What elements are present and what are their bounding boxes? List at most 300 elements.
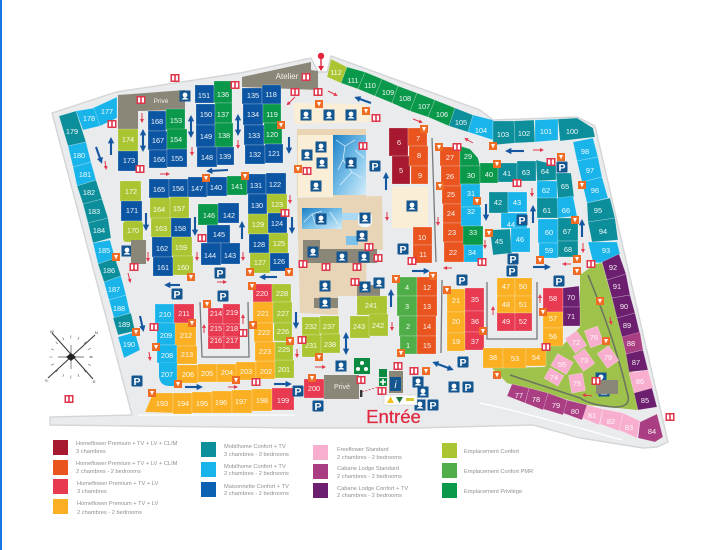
lots: pink lodges on lawn: 75 bbox=[573, 379, 581, 388]
lots: pink lodges on lawn bbox=[544, 326, 619, 393]
legend column 3: Cabane Lodge Confort + TV bbox=[337, 486, 408, 492]
lots: central-west block: 142 bbox=[223, 211, 235, 220]
lots: central block 231-243: 242 bbox=[372, 321, 384, 330]
lots: block 22-46: 46 bbox=[516, 235, 524, 244]
legend column 1: Homeflower Premium + TV + LV bbox=[77, 481, 159, 487]
lots: central block 231-243: 237 bbox=[323, 322, 335, 331]
lots: central-west block: 159 bbox=[175, 243, 187, 252]
lots: south-east perimeter: 90 bbox=[620, 302, 628, 311]
lots: block 47-58: 70 bbox=[567, 293, 575, 302]
lots: south-west block: 203 bbox=[240, 367, 252, 376]
lots: block 47-58: 47 bbox=[502, 282, 510, 291]
lots: block 22-46: 27 bbox=[446, 153, 454, 162]
lots: north-west perimeter: 179 bbox=[66, 127, 78, 136]
lots: north-east strip 112-100: 109 bbox=[382, 88, 394, 97]
lots: north-west perimeter: 186 bbox=[103, 266, 115, 275]
lots: south row 193-200 bbox=[145, 379, 324, 414]
lots: block 135-118: 118 bbox=[265, 90, 277, 99]
lots: south-west block: 220 bbox=[256, 289, 268, 298]
lots: east strip 98-93: 98 bbox=[581, 147, 589, 156]
lots: south-west block: 222 bbox=[258, 328, 270, 337]
lots: block 1-4 and 12-15: 1 bbox=[406, 341, 410, 350]
icons: parking signs: P bbox=[508, 266, 516, 278]
lawn: south-east field bbox=[492, 263, 638, 410]
lots: central-west block: 170 bbox=[127, 226, 139, 235]
lots: south row 193-200: 199 bbox=[277, 396, 289, 405]
lots: block 59-68: 67 bbox=[563, 227, 571, 236]
lots: block 5-9: 5 bbox=[399, 166, 403, 175]
lots: block 168-136: 174 bbox=[122, 135, 134, 144]
lots: block 22-46: 63 bbox=[522, 168, 530, 177]
icons: parking signs: P bbox=[555, 276, 563, 288]
lots: central-west block bbox=[120, 173, 289, 276]
icons: parking signs: P bbox=[518, 215, 526, 227]
lots: block 19-21 and 35-37: 37 bbox=[471, 337, 479, 346]
legend column 4: Emplacement Confort PMR bbox=[464, 469, 533, 475]
lots: pink lodges on lawn: 55 bbox=[558, 360, 566, 369]
lots: north-east strip 112-100: 111 bbox=[347, 76, 359, 85]
legend column 3: Freeflower Standard bbox=[337, 447, 389, 453]
lots: block 22-46 bbox=[440, 146, 556, 262]
icons: parking signs bbox=[132, 160, 568, 413]
legend column 1: 2 chambres - 2 bedrooms bbox=[76, 469, 141, 475]
lots: block 168-136: 149 bbox=[200, 132, 212, 141]
lots: block 59-68: 59 bbox=[545, 246, 553, 255]
lots: pink lodges on lawn: 79 bbox=[604, 353, 612, 362]
lots: block 47-58: 50 bbox=[519, 282, 527, 291]
first aid icons bbox=[379, 369, 387, 386]
lots: north-east strip 112-100: 102 bbox=[518, 129, 530, 138]
legend column 1: Homeflower Premium + TV + LV + CLIM bbox=[76, 441, 178, 447]
central tan terrace with pool bbox=[297, 196, 383, 315]
lots: south-east perimeter: 78 bbox=[532, 395, 540, 404]
lots: block 135-118: 119 bbox=[266, 110, 278, 119]
lots: south-west block: 218 bbox=[226, 324, 238, 333]
lots: north-east strip 112-100: 108 bbox=[399, 94, 411, 103]
lots: block 22-46: 42 bbox=[494, 198, 502, 207]
lots: block 1-4 and 12-15: 14 bbox=[423, 322, 431, 331]
lots: block 22-46: 64 bbox=[541, 167, 549, 176]
lots: pink lodges on lawn: 73 bbox=[580, 356, 588, 365]
legend column 4 bbox=[442, 443, 533, 498]
lots: north-west perimeter: 187 bbox=[108, 285, 120, 294]
page edge stripe bbox=[0, 0, 2, 550]
lots: block 168-136: 166 bbox=[153, 155, 165, 164]
lots: block 47-58: 56 bbox=[549, 332, 557, 341]
blue traffic arrows bbox=[96, 98, 582, 387]
lots: block 1-4 and 12-15: 3 bbox=[405, 302, 409, 311]
toilets block west bbox=[131, 240, 146, 264]
lots: block 1-4 and 12-15: 13 bbox=[423, 302, 431, 311]
icons: parking signs: P bbox=[133, 376, 141, 388]
lots: south-west block: 215 bbox=[210, 324, 222, 333]
lots: central-west block: 160 bbox=[177, 263, 189, 272]
lots: central-west block: 143 bbox=[224, 251, 236, 260]
lots: central-west block: 147 bbox=[191, 184, 203, 193]
beige zone: upper services bbox=[293, 103, 372, 124]
compass rose: S bbox=[45, 378, 48, 383]
lots: south row 193-200: 198 bbox=[256, 396, 268, 405]
lots: north-east strip 112-100: 104 bbox=[475, 126, 487, 135]
entrance label: Entrée bbox=[366, 406, 421, 427]
legend column 2: 2 chambres - 2 bedrooms bbox=[224, 491, 289, 497]
lots: south-west block: 223 bbox=[259, 347, 271, 356]
lots: central-west block: 144 bbox=[204, 251, 216, 260]
lots: block 168-136: 138 bbox=[218, 131, 230, 140]
icons: parking signs: P bbox=[464, 382, 472, 394]
lots: block 22-46: 24 bbox=[447, 209, 455, 218]
lots: south-east perimeter: 83 bbox=[625, 423, 633, 432]
lots: south-east perimeter: 84 bbox=[648, 427, 656, 436]
building: Privé south: Privé bbox=[334, 384, 350, 391]
lots: pink lodges on lawn: 76 bbox=[590, 333, 598, 342]
lots: block 135-118: 121 bbox=[268, 149, 280, 158]
lots: central block 231-243: 231 bbox=[305, 341, 317, 350]
lots: block 1-4 and 12-15: 4 bbox=[405, 283, 409, 292]
lots: block 1-4 and 12-15: 2 bbox=[406, 322, 410, 331]
lots: east strip 98-93: 94 bbox=[599, 227, 607, 236]
lots: north-east strip 112-100: 106 bbox=[436, 110, 448, 119]
lots: block 168-136 bbox=[118, 81, 234, 171]
legend column 1 bbox=[53, 440, 178, 516]
lots: south-west block: 205 bbox=[201, 369, 213, 378]
lots: central-west block: 172 bbox=[125, 187, 137, 196]
lots: south-west block bbox=[155, 284, 294, 386]
lots: block 19-21 and 35-37: 35 bbox=[471, 295, 479, 304]
lots: central-west block: 131 bbox=[250, 181, 262, 190]
lots: central block 231-243: 241 bbox=[365, 301, 377, 310]
lots: block 22-46: 23 bbox=[448, 228, 456, 237]
lots: south-west block: 214 bbox=[210, 309, 222, 318]
lots: south-west block: 221 bbox=[257, 309, 269, 318]
lots: south-east perimeter: 77 bbox=[515, 391, 523, 400]
service band grey bbox=[303, 240, 380, 308]
lots: block 22-46: 40 bbox=[485, 170, 493, 179]
lots: south-west block: 228 bbox=[276, 289, 288, 298]
lots: block 22-46: 33 bbox=[469, 228, 477, 237]
lots: block 59-68: 66 bbox=[562, 206, 570, 215]
lots: block 135-118: 134 bbox=[247, 110, 259, 119]
icons: parking signs: P bbox=[216, 268, 224, 280]
lots: north-east strip 112-100: 110 bbox=[364, 81, 376, 90]
legend column 1: 2 chambres - 2 bedrooms bbox=[77, 510, 142, 516]
lots: south-west block: 216 bbox=[210, 336, 222, 345]
lots: block 168-136: 167 bbox=[152, 136, 164, 145]
lots: central-west block: 158 bbox=[174, 224, 186, 233]
lots: central-west block: 128 bbox=[253, 240, 265, 249]
lots: block 59-68: 65 bbox=[561, 182, 569, 191]
building: Privé north-west bbox=[118, 90, 185, 129]
red one-way arrows bbox=[105, 91, 611, 396]
lots: south-west block: 211 bbox=[178, 309, 190, 318]
legend column 2: 2 chambres - 2 bedrooms bbox=[224, 471, 289, 477]
lots: central-west block: 122 bbox=[269, 180, 281, 189]
lots: block 47-58: 52 bbox=[519, 317, 527, 326]
icons: parking signs: P bbox=[399, 244, 407, 256]
lots: block 22-46: 30 bbox=[467, 171, 475, 180]
lots: south-east perimeter: 88 bbox=[627, 339, 635, 348]
legend column 2: 3 chambres - 3 bedrooms bbox=[224, 452, 289, 458]
icons: parking signs: P bbox=[458, 275, 466, 287]
lots: block 168-136: 148 bbox=[201, 153, 213, 162]
lots: block 19-21 and 35-37: 20 bbox=[452, 317, 460, 326]
lots: north-east strip 112-100: 100 bbox=[566, 127, 578, 136]
lots: block 168-136: 151 bbox=[198, 91, 210, 100]
lots: south row 193-200: 193 bbox=[156, 399, 168, 408]
lots: north-west perimeter: 181 bbox=[79, 170, 91, 179]
lots: block 5-9: 10 bbox=[418, 233, 426, 242]
lots: block 135-118: 132 bbox=[249, 150, 261, 159]
icons: parking signs: P bbox=[429, 400, 437, 412]
lots: south-east perimeter: 82 bbox=[607, 417, 615, 426]
legend column 1: 3 chambres bbox=[76, 449, 106, 455]
warning signs bbox=[384, 395, 417, 405]
lots: central block 231-243: 243 bbox=[353, 322, 365, 331]
lots: block 1-4 and 12-15 bbox=[397, 277, 437, 354]
legend column 3: 2 chambres - 2 bedrooms bbox=[337, 455, 402, 461]
lots: block 22-46: 31 bbox=[467, 189, 475, 198]
lots: pink lodges on lawn: 74 bbox=[550, 373, 558, 382]
lots: central-west block: 164 bbox=[153, 205, 165, 214]
lots: north-west perimeter: 188 bbox=[113, 304, 125, 313]
building: Atelier: Atelier bbox=[276, 72, 299, 81]
lots: south-west block: 204 bbox=[221, 368, 233, 377]
lots: block 168-136: 168 bbox=[151, 117, 163, 126]
lots: central-west block: 123 bbox=[271, 200, 283, 209]
lots: block 5-9: 6 bbox=[397, 138, 401, 147]
lots: central-west block: 126 bbox=[273, 257, 285, 266]
lots: south-west block: 206 bbox=[182, 370, 194, 379]
lots: block 22-46: 25 bbox=[447, 190, 455, 199]
legend column 1: Homeflower Premium + TV + LV + CLIM bbox=[76, 461, 178, 467]
lots: north-west perimeter: 184 bbox=[93, 226, 105, 235]
icons: blue service tiles bbox=[122, 90, 610, 410]
legend column 3: 2 chambres - 2 bedrooms bbox=[337, 493, 402, 499]
lots: central-west block: 161 bbox=[157, 263, 169, 272]
lots: south-east perimeter: 81 bbox=[588, 411, 596, 420]
lots: block 19-21 and 35-37: 36 bbox=[471, 317, 479, 326]
lots: block 22-46: 43 bbox=[513, 198, 521, 207]
lots: east strip 98-93 bbox=[573, 138, 620, 263]
lots: central-west block: 163 bbox=[155, 224, 167, 233]
legend column 2: Maisonnette Confort + TV bbox=[224, 484, 289, 490]
legend column 3: 2 chambres - 2 bedrooms bbox=[337, 474, 402, 480]
icons: orange tiles bbox=[112, 100, 610, 397]
compass rose: W bbox=[50, 329, 54, 334]
lots: south-west block: 208 bbox=[161, 351, 173, 360]
compass rose bbox=[45, 329, 98, 384]
site ground bbox=[50, 56, 668, 448]
lots: central block 231-243 bbox=[302, 296, 388, 357]
lots: block 47-58: 57 bbox=[549, 314, 557, 323]
lots: south-east perimeter: 80 bbox=[571, 407, 579, 416]
lots: north-west perimeter: 185 bbox=[98, 246, 110, 255]
lots: block 47-58: 51 bbox=[519, 300, 527, 309]
lots: central-west block: 157 bbox=[173, 204, 185, 213]
icons: parking signs: P bbox=[459, 357, 467, 369]
lots: block 135-118: 120 bbox=[266, 130, 278, 139]
legend column 1: 3 chambres bbox=[77, 489, 107, 495]
lots: south-east perimeter: 89 bbox=[623, 321, 631, 330]
lots: block 22-46: 32 bbox=[467, 207, 475, 216]
lots: north-west perimeter: 177 bbox=[101, 107, 113, 116]
lots: block 5-9: 11 bbox=[419, 250, 427, 259]
beige zone: east of lots 5 bbox=[392, 187, 428, 228]
lots: south-west block: 226 bbox=[277, 327, 289, 336]
icons: parking signs: P bbox=[558, 162, 566, 174]
lots: south row 193-200: 196 bbox=[215, 398, 227, 407]
lots: north-west perimeter: 178 bbox=[83, 114, 95, 123]
lots: south-east perimeter: 92 bbox=[609, 263, 617, 272]
lots: block 135-118 bbox=[242, 85, 283, 164]
toilets block east bbox=[596, 380, 618, 394]
lots: south-west block: 217 bbox=[226, 336, 238, 345]
lots: block 59-68: 61 bbox=[543, 206, 551, 215]
lots: block 5-9: 8 bbox=[417, 151, 421, 160]
legend column 1: Homeflower Premium + TV + LV bbox=[77, 501, 159, 507]
lots: south row 193-200: 200 bbox=[308, 384, 320, 393]
lots: block 19-21 and 35-37: 21 bbox=[452, 296, 460, 305]
lots: north-west perimeter: 182 bbox=[83, 188, 95, 197]
lots: south row 193-200: 195 bbox=[196, 399, 208, 408]
lots: block 1-4 and 12-15: 12 bbox=[423, 283, 431, 292]
first aid assembly point bbox=[354, 358, 370, 374]
entrance barrier bbox=[360, 387, 378, 397]
lots: block 5-9 bbox=[389, 128, 432, 263]
lots: south-east perimeter: 86 bbox=[636, 377, 644, 386]
icons: parking signs: P bbox=[173, 289, 181, 301]
lots: block 47-58: 71 bbox=[567, 312, 575, 321]
lots: south-west block: 210 bbox=[159, 310, 171, 319]
lots: central-west block: 162 bbox=[156, 244, 168, 253]
reception block: i bbox=[394, 380, 397, 391]
lots: east strip 98-93: 96 bbox=[591, 186, 599, 195]
lots: central-west block: 129 bbox=[252, 220, 264, 229]
legend column 2 bbox=[201, 442, 289, 497]
lots: south-east perimeter: 85 bbox=[641, 396, 649, 405]
lots: north-east strip 112-100: 105 bbox=[455, 118, 467, 127]
lots: north-east strip 112-100: 101 bbox=[540, 127, 552, 136]
lots: central block 231-243: 238 bbox=[324, 340, 336, 349]
lots: block 22-46: 26 bbox=[446, 172, 454, 181]
lots: south-west block: 207 bbox=[161, 370, 173, 379]
lots: east strip 98-93: 95 bbox=[594, 206, 602, 215]
lots: south-west block: 209 bbox=[160, 331, 172, 340]
lots: south-west block: 225 bbox=[278, 345, 290, 354]
lots: block 19-21 and 35-37 bbox=[447, 288, 484, 351]
building: Atelier bbox=[242, 62, 318, 90]
lots: block 168-136: 137 bbox=[217, 110, 229, 119]
icons: parking signs: P bbox=[509, 254, 517, 266]
lots: block 168-136: 154 bbox=[170, 135, 182, 144]
lots: north-east strip 112-100 bbox=[327, 59, 595, 145]
building: Privé north-west: Privé bbox=[154, 98, 169, 105]
lots: block 19-21 and 35-37: 19 bbox=[452, 337, 460, 346]
lots: block 59-68: 68 bbox=[564, 245, 572, 254]
lots: north-west perimeter: 183 bbox=[88, 207, 100, 216]
lots: south-east perimeter: 87 bbox=[632, 358, 640, 367]
lots: block 47-58: 38 bbox=[489, 353, 497, 362]
lots: south-west block: 227 bbox=[277, 309, 289, 318]
lots: block 168-136: 173 bbox=[123, 156, 135, 165]
lots: central-west block: 146 bbox=[203, 211, 215, 220]
lots: central-west block: 130 bbox=[251, 201, 263, 210]
lots: south-west block: 201 bbox=[278, 365, 290, 374]
lots: block 168-136: 155 bbox=[171, 154, 183, 163]
lots: central-west block: 165 bbox=[153, 185, 165, 194]
lots: block 22-46: 41 bbox=[503, 169, 511, 178]
lots: north-east strip 112-100: 112 bbox=[330, 68, 342, 77]
lots: block 22-46: 45 bbox=[495, 237, 503, 246]
lots: block 47-58 bbox=[483, 278, 580, 368]
lots: central-west block: 156 bbox=[172, 184, 184, 193]
lots: block 5-9: 9 bbox=[418, 171, 422, 180]
lots: block 168-136: 136 bbox=[217, 90, 229, 99]
lots: south-west block: 213 bbox=[181, 350, 193, 359]
road edges bbox=[138, 403, 622, 440]
icons: parking signs: P bbox=[371, 161, 379, 173]
legend column 3: Cabane Lodge Standard bbox=[337, 466, 399, 472]
lots: block 47-58: 48 bbox=[502, 300, 510, 309]
entrance marker pin bbox=[318, 53, 324, 71]
lots: block 135-118: 133 bbox=[248, 131, 260, 140]
lots: block 59-68: 62 bbox=[542, 186, 550, 195]
icons: parking signs: P bbox=[314, 401, 322, 413]
lots: central block 231-243: 232 bbox=[305, 322, 317, 331]
icons: parking signs: P bbox=[219, 291, 227, 303]
lots: central-west block: 141 bbox=[231, 182, 243, 191]
lots: south-west block: 219 bbox=[226, 308, 238, 317]
lots: south-west block: 212 bbox=[180, 331, 192, 340]
lots: south row 193-200: 197 bbox=[235, 397, 247, 406]
lots: block 47-58: 49 bbox=[502, 317, 510, 326]
lots: central-west block: 124 bbox=[271, 219, 283, 228]
compass rose: E bbox=[93, 379, 96, 384]
lots: pink lodges on lawn: 72 bbox=[572, 338, 580, 347]
lots: north-west perimeter: 189 bbox=[118, 320, 130, 329]
icons: parking signs: P bbox=[294, 386, 302, 398]
lots: block 168-136: 153 bbox=[170, 116, 182, 125]
lots: block 22-46: 29 bbox=[464, 152, 472, 161]
compass rose: N bbox=[95, 330, 98, 335]
lots: central-west block: 171 bbox=[126, 206, 138, 215]
lots: south-west block: 202 bbox=[260, 367, 272, 376]
lots: block 47-58: 54 bbox=[532, 353, 540, 362]
lots: north-west perimeter bbox=[59, 97, 140, 358]
lots: block 47-58: 53 bbox=[511, 354, 519, 363]
lots: central-west block: 125 bbox=[273, 239, 285, 248]
lots: east strip 98-93: 93 bbox=[602, 246, 610, 255]
lots: north-east strip 112-100: 103 bbox=[497, 130, 509, 139]
legend column 4: Emplacement Privilège bbox=[464, 489, 522, 495]
lots: central-west block: 140 bbox=[210, 183, 222, 192]
reception block bbox=[389, 371, 403, 393]
legend column 2: Mobilhome Confort + TV bbox=[224, 444, 286, 450]
legend column 4: Emplacement Confort bbox=[464, 449, 519, 455]
lots: south row 193-200: 194 bbox=[177, 399, 189, 408]
lots: north-west perimeter: 180 bbox=[73, 151, 85, 160]
lots: south-east perimeter bbox=[507, 254, 663, 442]
lots: south-east perimeter: 79 bbox=[552, 401, 560, 410]
lots: block 47-58: 58 bbox=[549, 294, 557, 303]
lots: south-east perimeter: 91 bbox=[613, 282, 621, 291]
lots: block 59-68 bbox=[537, 173, 578, 258]
lots: block 1-4 and 12-15: 15 bbox=[423, 341, 431, 350]
building: Privé south bbox=[324, 375, 359, 399]
lots: north-east strip 112-100: 107 bbox=[418, 102, 430, 111]
lots: central-west block: 145 bbox=[213, 230, 225, 239]
lawn service path bbox=[510, 275, 628, 407]
